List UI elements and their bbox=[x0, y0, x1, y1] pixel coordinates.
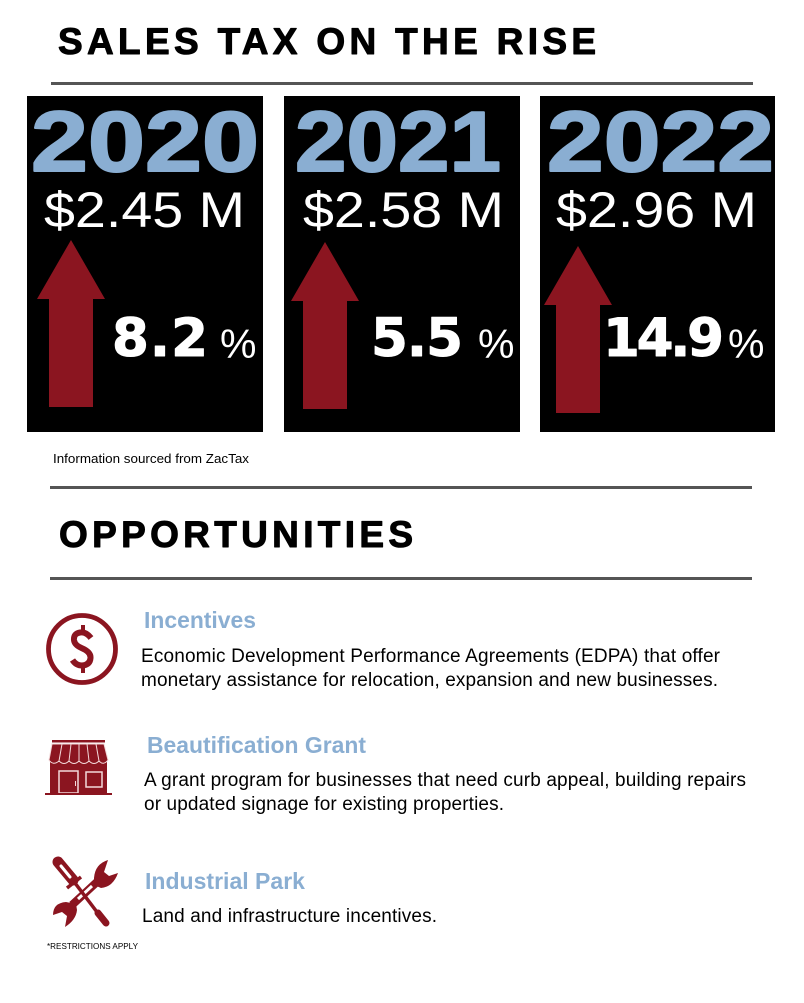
text: industrial park: Land and infrastructure incentives. bbox=[142, 906, 437, 927]
text: incentives: monetary assistance for relocation, expansion and new businesses. bbox=[141, 670, 718, 691]
percent sign 2021: % bbox=[478, 321, 514, 367]
arrow 2021 bbox=[291, 242, 359, 409]
percent sign 2022: % bbox=[728, 321, 764, 367]
footnote: *RESTRICTIONS APPLY bbox=[47, 941, 138, 951]
arrow 2022 bbox=[544, 246, 612, 413]
text: beautification grant: A grant program for businesses that need curb appeal, building repairs bbox=[144, 770, 746, 791]
text: incentives bbox=[141, 646, 721, 691]
icon: storefront bbox=[45, 740, 112, 795]
panel: 2021 bbox=[284, 95, 520, 432]
text: beautification grant: or updated signage for existing properties. bbox=[144, 794, 504, 815]
change 2022: 14.9 bbox=[603, 308, 724, 369]
icon: dollar bbox=[48, 616, 116, 682]
percent sign 2020: % bbox=[220, 321, 256, 367]
panel: 2022 bbox=[540, 95, 775, 432]
year 2022: 2022 bbox=[547, 95, 774, 190]
change 2021: 5.5 bbox=[371, 308, 463, 369]
subheading: incentives: Incentives bbox=[144, 607, 256, 633]
year 2020: 2020 bbox=[31, 95, 259, 190]
title: SALES TAX ON THE RISE bbox=[58, 21, 596, 62]
change 2020: 8.2 bbox=[112, 308, 208, 369]
icon: tools bbox=[53, 860, 118, 927]
year 2021: 2021 bbox=[295, 95, 501, 190]
text: incentives: Economic Development Performance Agreements (EDPA) that offer bbox=[141, 646, 721, 667]
text: beautification grant bbox=[144, 770, 746, 815]
amount 2021: $2.58 M bbox=[303, 182, 504, 238]
amount 2020: $2.45 M bbox=[44, 182, 245, 238]
amount 2022: $2.96 M bbox=[556, 182, 757, 238]
panel: 2020 bbox=[27, 95, 263, 432]
source note: Information sourced from ZacTax bbox=[53, 451, 250, 466]
arrow 2020 bbox=[37, 240, 105, 407]
subheading: beautification grant: Beautification Grant bbox=[147, 732, 366, 758]
heading: opportunities: OPPORTUNITIES bbox=[59, 514, 413, 555]
subheading: industrial park: Industrial Park bbox=[145, 868, 305, 894]
